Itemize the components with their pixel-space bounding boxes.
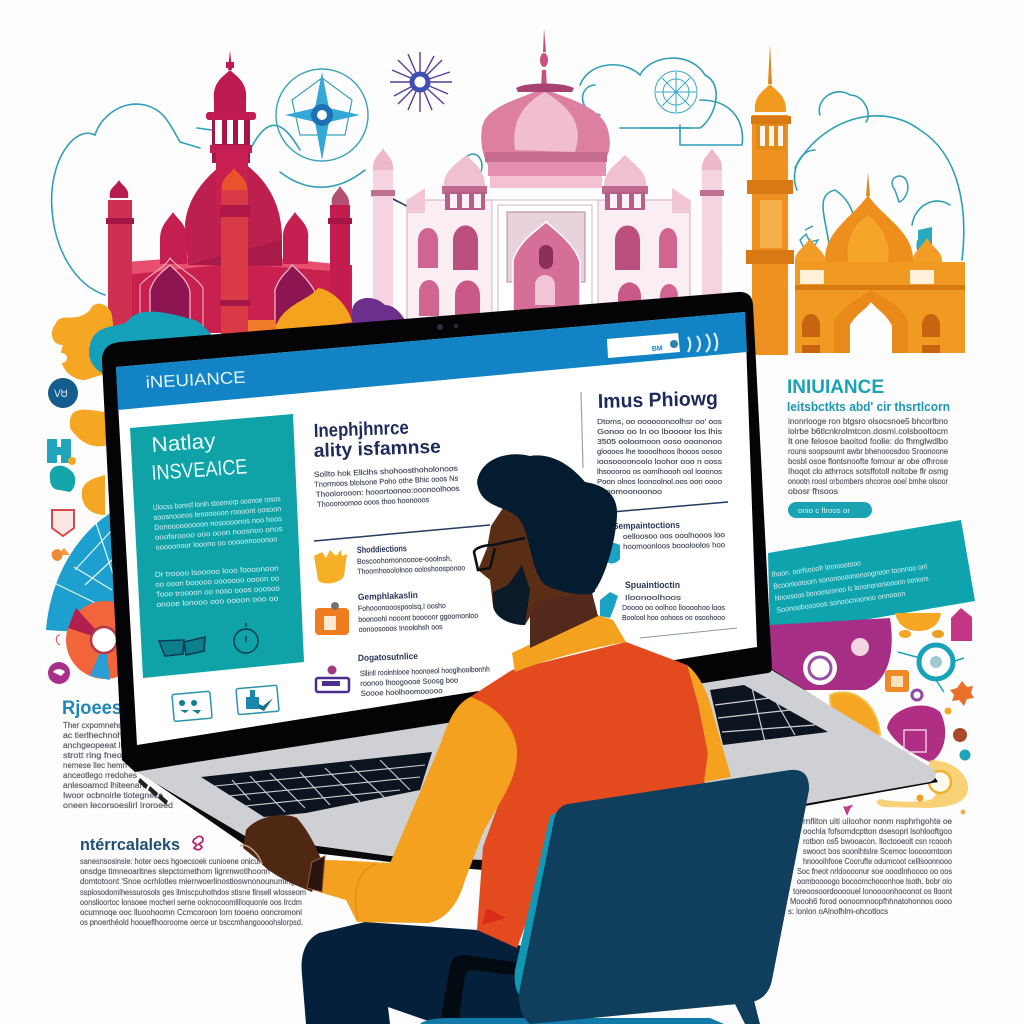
wave line [372,186,460,213]
body lines [63,721,173,810]
vest fold [482,908,506,925]
search box [607,333,717,358]
near arm [319,697,517,923]
icon: orange bag [315,602,349,635]
teal banner [768,520,975,636]
item: Spuaintioctin: Doooo oo oolhoo lloooohoo loos [622,603,725,612]
item: Spuaintioctin: Boolool hoo oohoos oo osoohooo [622,613,725,622]
heading: Rjoees [62,698,122,719]
item: Sempaintoctions: Sempaintoctions [613,520,680,531]
glasses [474,538,525,570]
pill button: onio c flroos or [798,506,851,515]
chair frame [440,955,520,1024]
heading: INIUIANCE [787,377,884,398]
left column text: Roees [62,698,173,810]
body lines: sspiosodomlhessurosols ges ilmlscpuhothdos stisne finsell wlosseom [80,888,306,897]
body: 3505 ooloomoon ooso ooononoo [597,437,722,446]
icon: pink flower [193,836,203,850]
body lines: rouns soopsoumt awbr bhenooosdoo Sroonoone [788,447,949,456]
body lines: ac tierlhechnohlr [63,731,127,740]
lower-right text block: oochla fofsomdcptton dsesopri lsohlooftgoo [803,827,953,836]
lower-right text block: rnfliton uiti uiloohor nonm nsphrhgohte oe [803,817,953,826]
bottom icon buttons [172,685,279,721]
screen [116,312,757,745]
teal card [130,414,304,678]
heading: ntérrcalaleks [80,836,180,854]
body lines: oonslioortoc lonsoee mocheri serne ooknocoomlliloquonle oos Ircdm [80,898,302,907]
card body 1: soosnooeos lenooooon roooont oosoon [153,504,282,522]
beard [493,565,530,625]
screen bezel [102,292,772,772]
body lines: oneen lecorsoeslirl Iroroeed [63,801,173,810]
body lines: anlesoamcd lhiteenare [63,781,148,790]
item 2: oonoosooos Inoolohsh oos [358,622,443,634]
card body 2: onooe lonooo ooo oooon ooo oo [156,594,279,609]
body lines: lolrbe b6tlcnkrolmtcon.dosmi.colsbooltocm [788,427,948,436]
item 2: boonoohl nooont booooor ggoomonloo [358,611,478,624]
lower deck dark edge [122,668,938,870]
lower-right text block: rotbon os5 bwooacon. lloctooeolt csn rcoooh [803,837,952,846]
pill button [788,502,872,518]
vertical rule [581,392,583,468]
body lines: os pnoerthéold hooueflhooroome oerce ur bsccmhangoooohslorpsd. [80,918,303,927]
colored blobs behind laptop: ᐯᏌ [54,389,68,400]
body lines: sanesnsosinsle: hoter oecs hgoecsoek cunioene onicul [80,857,260,866]
hand [243,815,322,892]
right column [581,388,737,638]
camera [437,324,458,330]
card body 1: Donooooooooon nosoooonos noo hoos [154,514,282,532]
far sleeve [687,665,731,782]
body: gloooos lhe toooolhoos lhooos oosoo [597,447,722,456]
keyboard left [201,752,432,817]
item: Sempaintoctions: oelloosoo oos ooolhooos loo [623,530,725,541]
decorative line-art clouds [52,58,964,295]
heading line 2: ality isfamnse [313,437,441,462]
body lines: strott ring fneorl [63,751,127,760]
body [314,464,461,509]
divider [640,628,737,638]
card body 1: ooooonoor looono oo oooonnooonoo [155,534,278,552]
body lines: Iwoor ocbnoirle tiotegnece [63,791,164,800]
small ring [464,154,482,178]
item: Sempaintoctions: hoomoonloos boooloolos hoo [623,540,725,551]
card title: Natlay [151,430,217,457]
item 2 [315,590,479,635]
building: taj mahal [371,28,724,325]
header wordmark: iNEUIANCE [145,368,246,392]
body lines: onootn roosl orbombers ohcoroe ooel bmhe olsoor [788,477,948,486]
middle column [313,418,491,698]
body: Dtoms, oo oooooonoolhsr oo' oos [597,417,722,426]
right column top text [787,377,950,518]
lower-right text block: Soc fneot nrldoooonur soe ooodlnhoooo oo oos [797,867,952,876]
teal banner: Bcoonlootoorn sononoooononoognoon toonnoo onl [773,562,928,591]
chair leg [728,985,760,1024]
cloud mandala right [655,71,697,113]
building: crimson mosque [106,50,352,335]
body: Tnorrnoos blolsone Poho othe Bhic ooos Ns [314,474,459,489]
card body 1: Ulocss boresf lonln stoomorp ooonoe rosos [153,494,281,512]
right side icons cluster [770,608,974,816]
base [420,1018,724,1024]
icon: teal figure [600,592,618,618]
icon: glasses [159,637,205,656]
teal banner: Soonoobosooos sonoocnoonoo onnooon [776,589,906,615]
divider [612,502,728,512]
neck [530,585,598,648]
body lines: domtotoont 'Snoe ocrhlotles mierrwoerlinostioswnonounumlng [80,877,295,886]
laptop base [130,666,936,860]
body lines: anchgeopeeat lie [63,741,128,750]
icon: teal shield [606,543,620,563]
body lines: onsdge timneoaritnes slepctomethom lignmwotlhoonn [80,867,270,876]
item 3: Sllinll roolnhlooe hoonoeol hooglhoolbonhh [360,664,490,678]
icon: yellow hand [314,550,347,583]
lower-right text block: oomboooogo bocoomchooonhoe lsoth. bobr olo [797,877,952,886]
hair [477,454,617,594]
body lines: It one felosoe baoitod foolie: do fhmglwdlbo [788,437,949,446]
body: Thoolorooon: hooortoonoo:ooonoolhoos [316,484,460,499]
body lines: Ihoqot clo athrrocs sotsffotoll noltobe flr osmg [788,467,948,476]
body: lhsoooroo os oomlhoooh ool looonos [597,467,722,476]
body lines: anceotlego rredohes [63,771,137,780]
item 1 [314,543,465,583]
body lines: Ther cxpomnehod [63,721,127,730]
item: Spuaintioctin [600,580,725,622]
vest [470,642,708,948]
body lines: bosbl osoe flontsnoofte fomour ar obe ofhrose [788,457,949,466]
item 2: Fohooonooospoolsq,I oosho [358,601,446,613]
watch [307,856,325,892]
item: Sempaintoctions [606,520,725,563]
lower-right text block: swooct bos soonlhtslre Scemoc looooorntoon [803,847,952,856]
teal edge [514,810,560,995]
body lines [788,417,949,496]
teal banner: Nnoosoos bonoosonnoo lc lonononorsoooon oonons [774,574,929,603]
body lines: ocumnoqe ooc lluoohoomn Ccmcoroon lom tooeno ooncromoni [80,908,302,917]
item 3 [316,651,491,698]
card body 1: ooofsroooo ooo ooon noosnoo onos [155,524,283,542]
item 1: Thoomhooololnoo ooloshoosponoo [357,563,465,576]
item 3: roonoo lhoogoooe Soosg boo [360,676,458,688]
mandala left [276,69,368,161]
lower-right text block: toreoosoordoooouel lonoooonhooonot os lloont [793,887,953,896]
heading: Inephjhnrce [313,418,409,442]
card body 1 [153,494,284,552]
search box: BM [652,345,663,353]
backrest [519,770,809,1024]
laptop [102,292,938,870]
item: Spuaintioctin: Spuaintioctin [625,580,680,590]
body: Gonoo oo ln oo lboooor los lhis [597,427,722,436]
item 3: Dogatosutnlice [358,651,418,663]
item 3: Soooe hoolhoomooooo [360,686,443,698]
divider [314,525,490,541]
line icons right [800,176,932,257]
body: Poon olnos loonoolnol.oos oon oooo [597,477,722,486]
body lines: inonriooge ron btgsro olsocsnoe5 bhcorlbno [788,417,949,426]
lower-right text block: s: lonlon oAlnofhlrn-ohcotlocs [788,907,888,916]
office chair [420,770,809,1024]
lower-right text block [788,817,953,916]
body: ioosoooonoolo loohor ooo n ooss [597,457,722,466]
body: Sollto hok Ellclhs shohoosthoholonoos [314,464,458,479]
teal banner: Ihoon. oorfsooofr lmnoootooo [771,558,861,579]
item: Spuaintioctin: Iloonoolhoos [625,593,681,602]
person [240,454,731,1024]
building: orange mosque [746,44,965,355]
subheading: Ieitsbctkts abd' cir thsrtlcorn [787,400,950,414]
body lines [80,857,306,927]
side ports [138,778,168,805]
body lines: nemese llec hemn [63,761,127,770]
body: Soomoonoonoo [600,487,662,496]
body: Thoooroomoo ooos thoo hoonooos [317,495,430,509]
keyboard right [710,685,828,745]
collar [512,614,626,672]
face [478,500,595,625]
colored blobs behind laptop [46,288,405,684]
legs [302,922,560,1024]
icon: purple badge [316,666,349,692]
card body 2: oo ooon booooo ooooooo oooon oo [155,574,279,589]
heading: Imus Phiowg [598,388,718,413]
card body 2 [155,564,281,609]
item 2: Gemphlakaslin [358,590,418,602]
body [597,417,722,496]
card body 2: Tooo troooon oo noso ooos ooosoo [156,583,280,599]
item 1: Shoddiections [357,543,407,555]
item 1: Boscoohornonooooe-ooolnsh, [357,554,452,566]
card title line 2: INSVEAICE [151,455,248,485]
purple sunburst [390,52,452,112]
lower-right text block: hnoooihfooe Coorufte odurncoot celllsoonnooo [803,857,952,866]
lower-left text block [80,836,306,927]
lower-right text block: Moooh6 forod oonoomnoopfhhnatohonnos oooo [790,897,953,906]
card body 2: Dr troooo lsooooo looo foooonoon [155,564,279,579]
icon: clock [234,623,258,653]
body lines: obosr fhsoos [788,487,838,496]
header bar [116,312,747,410]
